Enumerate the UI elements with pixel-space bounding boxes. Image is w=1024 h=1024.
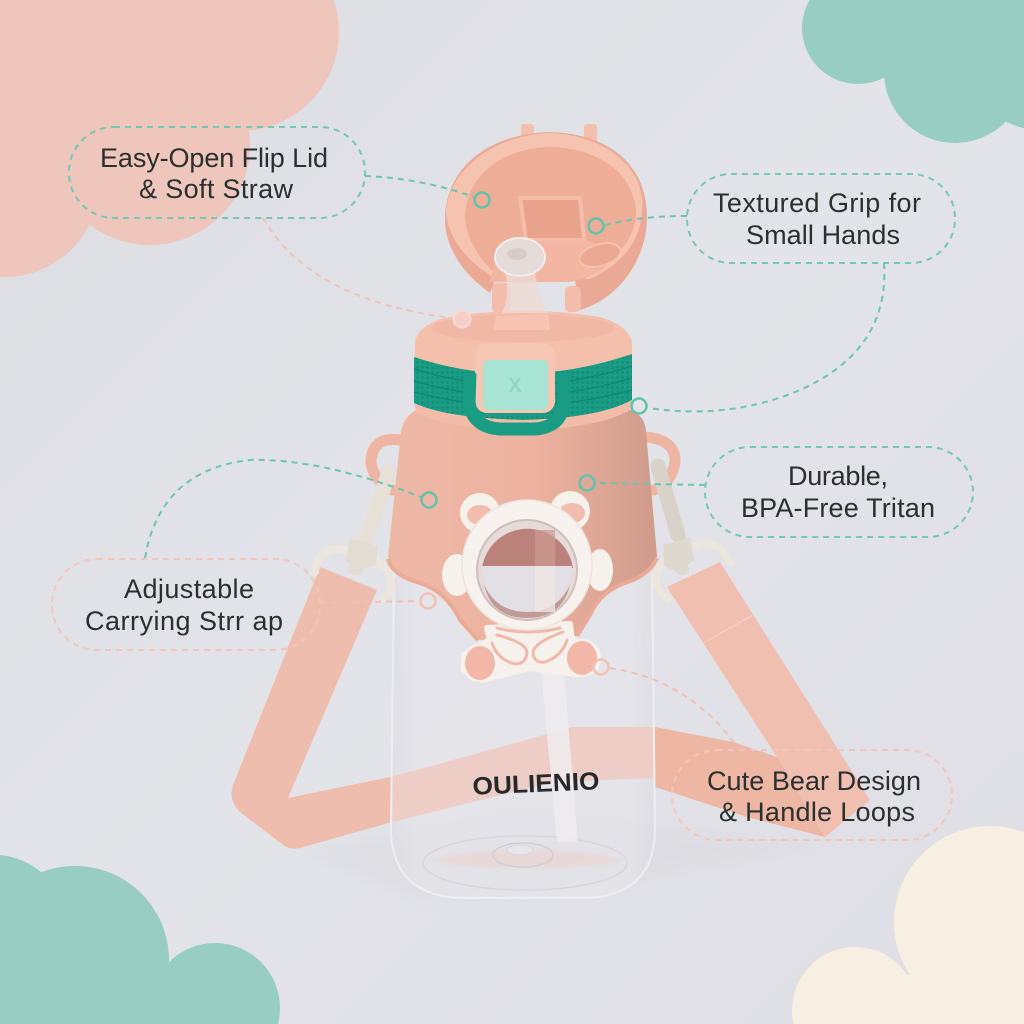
bear side lobes [442, 554, 472, 596]
strap clip: right [656, 466, 730, 600]
carrying strap [232, 562, 870, 849]
lid base [414, 311, 632, 430]
callout: textured grip: Small Hands [746, 220, 900, 250]
floor shadow [300, 810, 825, 900]
latch button [483, 360, 548, 410]
callout: carrying strap: Carrying Strr ap [85, 606, 283, 636]
brand wordmark: OULIENIO [472, 767, 600, 801]
callout: cute bear design [594, 660, 952, 840]
callout: cute bear design: & Handle Loops [719, 797, 915, 827]
flip lid [445, 124, 647, 313]
callout: carrying strap [52, 460, 436, 650]
callout: carrying strap: Adjustable [124, 574, 254, 604]
bear ears [460, 493, 500, 533]
cloud: bottom left [0, 855, 280, 1024]
teal handle [469, 373, 564, 429]
callout: durable tritan: BPA-Free Tritan [741, 493, 935, 523]
bottle: side handle loops [371, 437, 675, 490]
callout: easy-open flip lid: Easy-Open Flip Lid [100, 143, 328, 173]
bottle: clear body [391, 575, 655, 898]
helmet ring [462, 500, 592, 630]
callout: durable tritan: Durable, [788, 461, 888, 491]
round window [482, 529, 573, 568]
strap clip: left [315, 472, 391, 600]
soft straw [495, 238, 548, 313]
latch housing [475, 343, 555, 413]
bear window ornament [442, 491, 613, 682]
cloud: top left [0, 0, 339, 277]
callout: durable tritan [580, 447, 973, 537]
lid base: X [508, 375, 522, 397]
cloud: bottom right [792, 826, 1024, 1024]
inner straw [540, 660, 578, 842]
grip band [414, 354, 632, 420]
callout: textured grip: Textured Grip for [713, 188, 921, 218]
bear body [464, 624, 596, 680]
callout: easy-open flip lid: & Soft Straw [139, 174, 294, 204]
callout: cute bear design: Cute Bear Design [707, 766, 921, 796]
callout: textured grip [588, 174, 955, 414]
bottle: pink shoulder [388, 410, 657, 640]
cloud: top right [802, 0, 1024, 143]
callout: easy-open flip lid [69, 127, 490, 328]
